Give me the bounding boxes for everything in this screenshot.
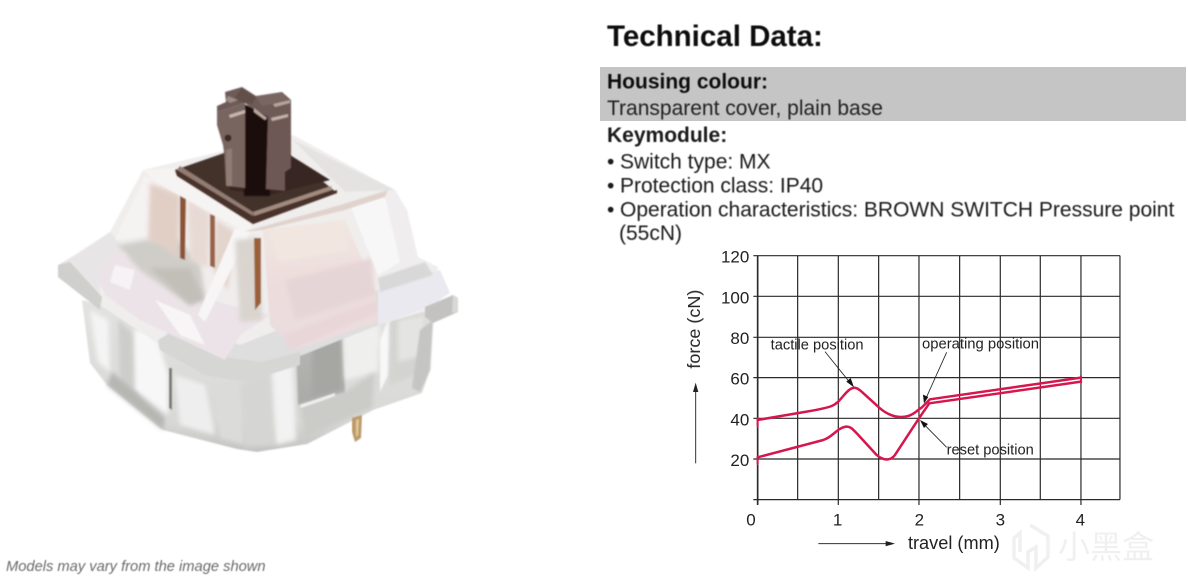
watermark logo	[1014, 525, 1048, 568]
actuation curve	[758, 378, 1081, 420]
annotation: tactile position: tactile position	[771, 338, 864, 354]
release curve	[758, 382, 1081, 459]
y axis tick labels: 60	[730, 370, 749, 389]
title: Technical Data:	[607, 20, 823, 53]
panel: housing colour	[600, 67, 1186, 121]
switch upper housing	[58, 135, 458, 382]
spec: switch type: •	[607, 150, 614, 174]
brown stem	[217, 87, 291, 196]
annotation: reset position	[920, 420, 1034, 459]
x axis tick labels	[746, 510, 1085, 529]
spec: operation characteristics: (55cN)	[619, 222, 682, 245]
gold contact pin	[352, 415, 362, 442]
spec: protection class: •	[607, 174, 614, 198]
y axis tick labels: 120	[721, 248, 749, 267]
watermark text: 小黑盒	[1058, 529, 1154, 565]
brown top plate	[175, 152, 337, 224]
y axis tick labels: 20	[730, 451, 749, 470]
heading: keymodule: Keymodule:	[607, 124, 727, 147]
chart grid	[753, 256, 1120, 505]
x axis title with arrow: travel (mm)	[908, 533, 1000, 553]
x axis tick labels: 0	[746, 510, 756, 529]
spec: operation characteristics: Operation characteristics: BROWN SWITCH Pressure point	[620, 198, 1174, 222]
x axis tick labels: 2	[915, 510, 924, 529]
force-travel chart	[684, 248, 1120, 553]
product photo: keyboard switch	[58, 87, 458, 452]
x axis tick labels: 3	[996, 510, 1005, 529]
y axis tick labels: 40	[730, 410, 749, 429]
switch base	[82, 300, 433, 452]
y axis tick labels	[721, 248, 749, 470]
y axis title with arrow: force (cN)	[684, 290, 704, 369]
caption: Models may vary from the image shown	[6, 559, 266, 575]
housing colour value: Transparent cover, plain base	[607, 97, 883, 120]
annotation: operating position: operating position	[922, 336, 1039, 352]
y axis tick labels: 100	[721, 288, 749, 307]
panel: keymodule specifications	[607, 124, 1174, 245]
heading: housing colour: Housing colour:	[607, 70, 768, 94]
spec: protection class: Protection class: IP40	[620, 174, 823, 198]
x axis tick labels: 4	[1076, 510, 1085, 529]
annotation: operating position	[922, 336, 1039, 403]
spec: operation characteristics: •	[607, 198, 614, 222]
annotation: reset position: reset position	[947, 443, 1034, 459]
watermark	[1014, 525, 1154, 568]
force curves	[758, 376, 1081, 464]
y axis title with arrow	[684, 290, 704, 463]
y axis tick labels: 80	[730, 329, 749, 348]
x axis tick labels: 1	[833, 510, 842, 529]
x axis title with arrow	[818, 533, 1000, 553]
annotation: tactile position	[771, 338, 864, 387]
spec: switch type: Switch type: MX	[620, 150, 771, 174]
